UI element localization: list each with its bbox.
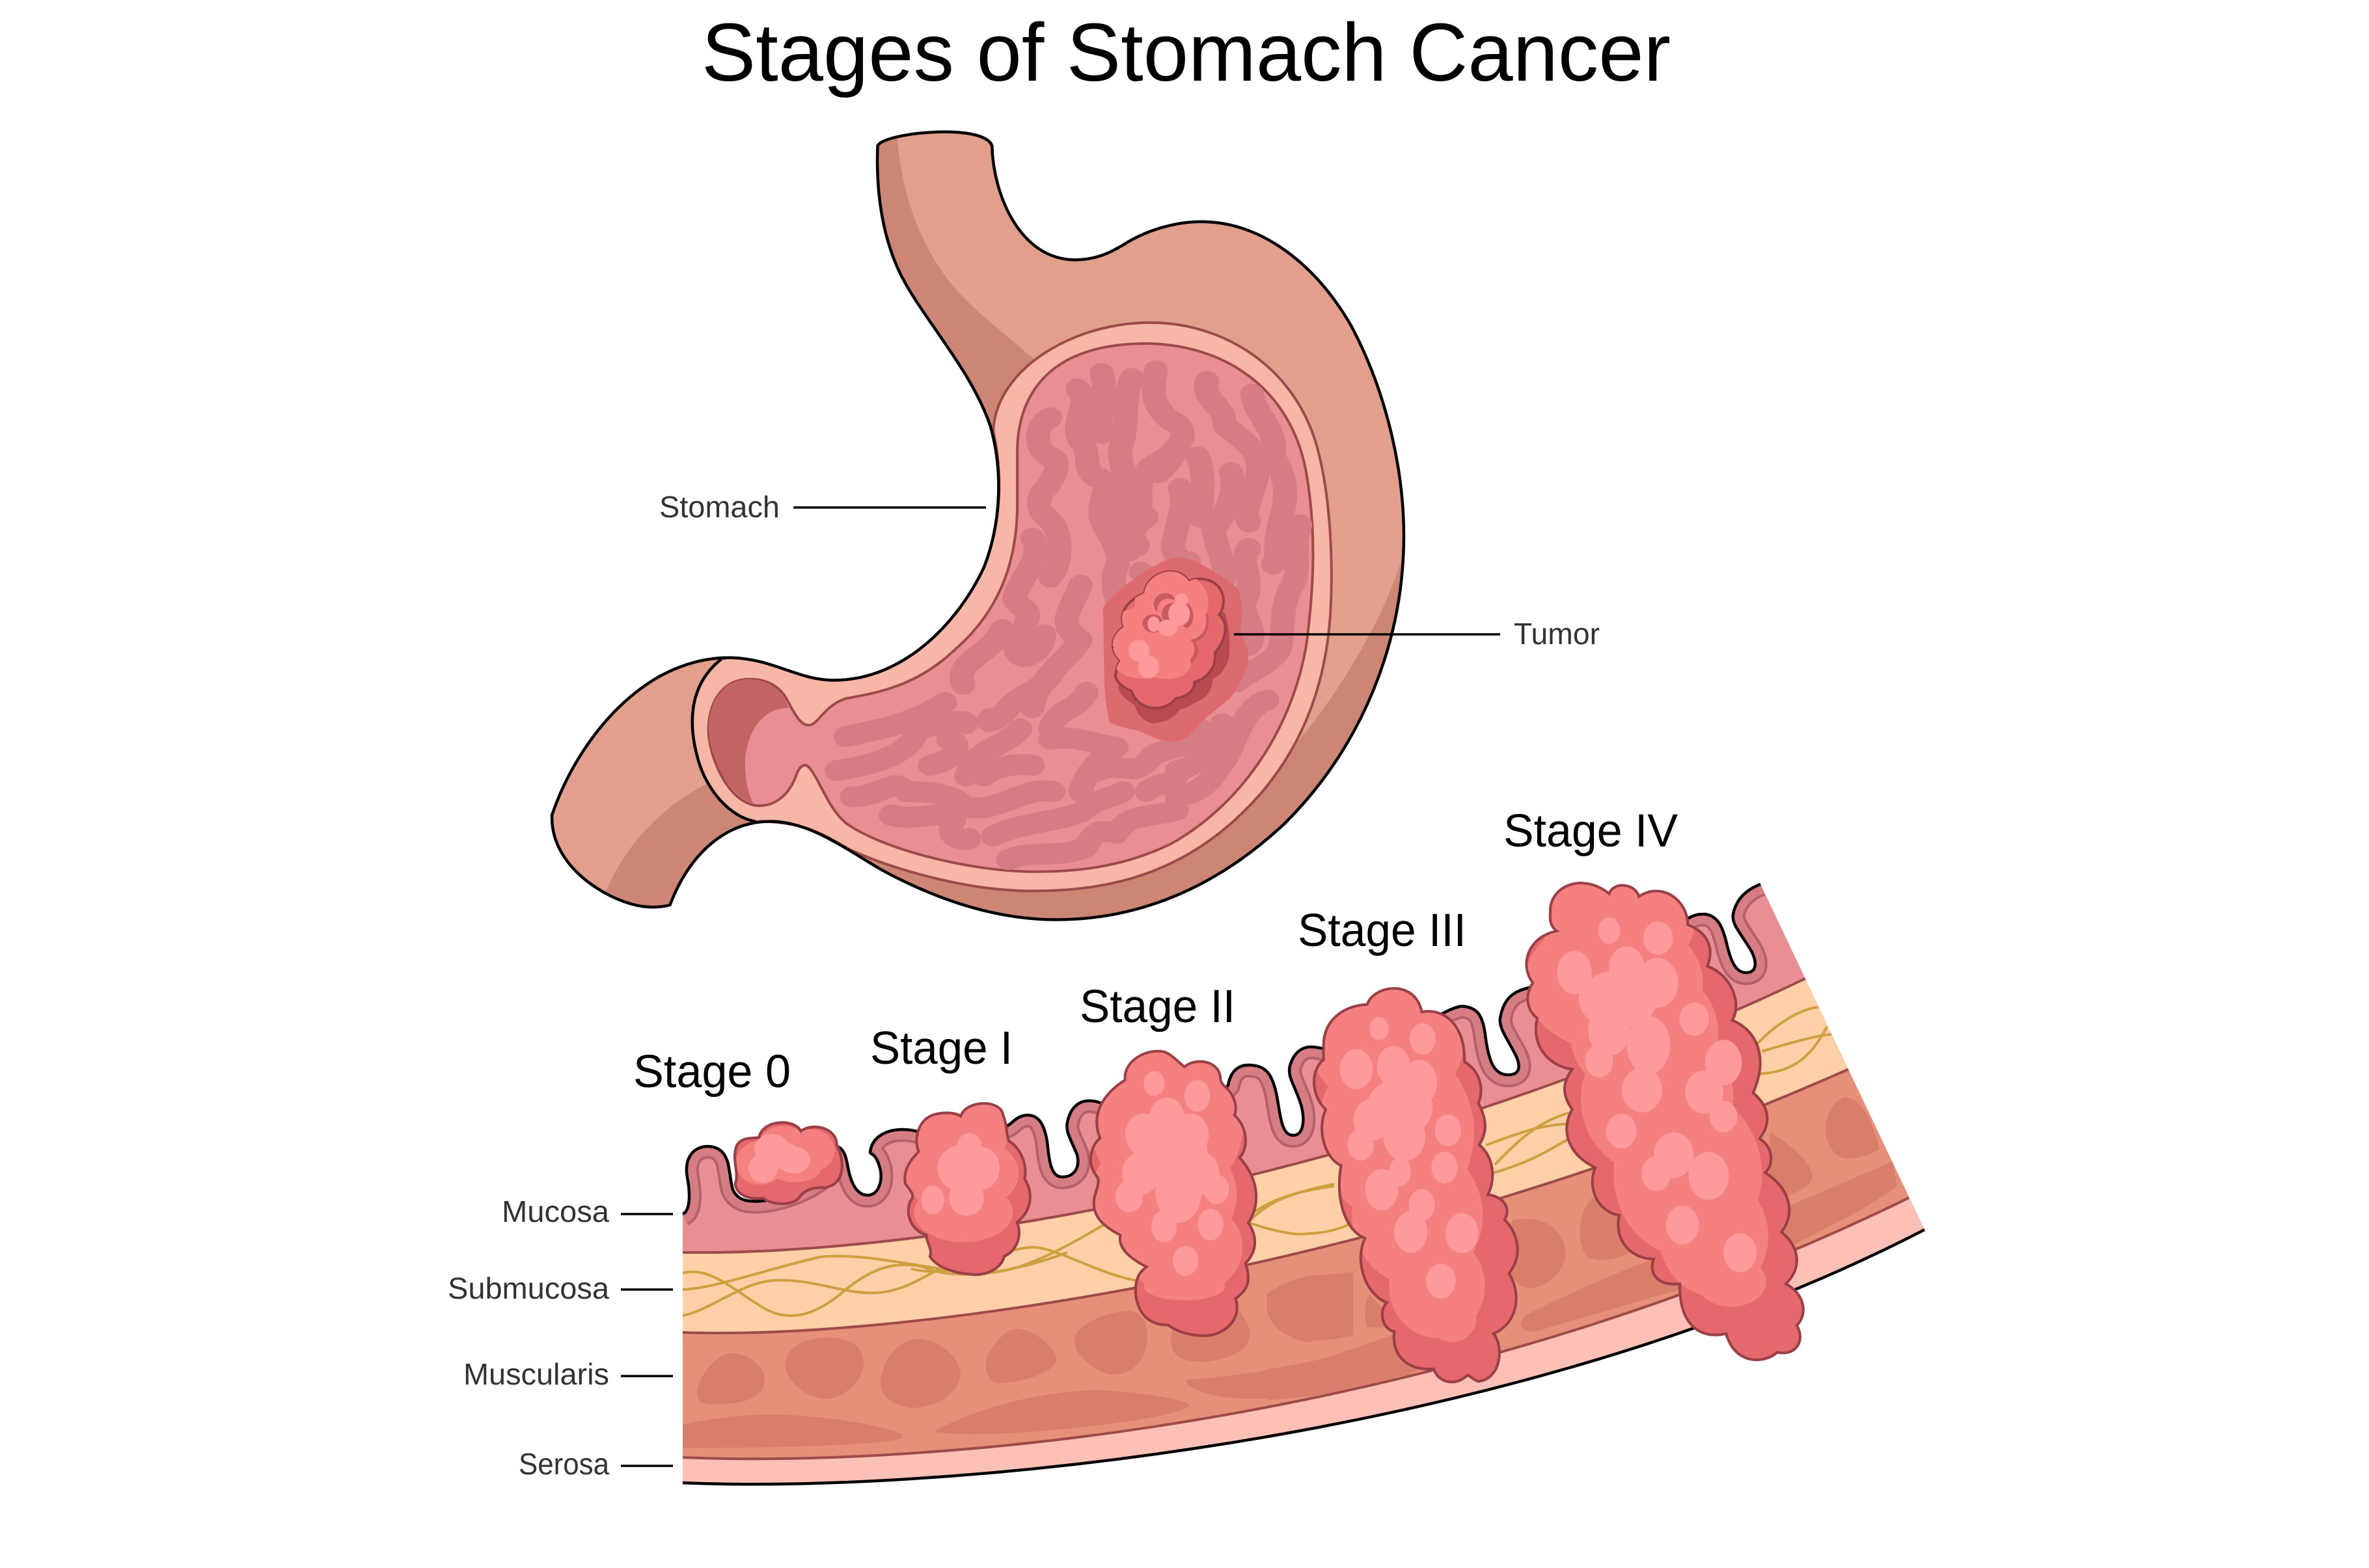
tumor: stage III (1311, 981, 1518, 1382)
label: Submucosa: Submucosa (448, 1271, 609, 1305)
tumor: stage I (903, 1100, 1030, 1275)
tumor: stage II (1091, 1048, 1256, 1336)
label: Serosa: Serosa (519, 1447, 609, 1481)
serosa layer (683, 1197, 1924, 1483)
label: Stage III: Stage III (1298, 905, 1466, 956)
submucosa nerve fibres (683, 1007, 1831, 1316)
tumor: stage IV (1524, 873, 1803, 1360)
tumor on stomach (1103, 558, 1248, 742)
label: Tumor: Tumor (1514, 617, 1600, 651)
gastric rugae folds (837, 371, 1300, 859)
stomach wall lining (692, 323, 1332, 891)
muscularis layer (683, 1070, 1924, 1457)
layer boundary lines (683, 979, 1909, 1459)
label: Stage I: Stage I (870, 1023, 1013, 1074)
label: Muscularis: Muscularis (463, 1357, 609, 1391)
label: Stomach: Stomach (659, 490, 780, 524)
label: Stage II: Stage II (1080, 981, 1235, 1033)
mucosa surface outline (683, 884, 1760, 1214)
stomach mucosa interior (709, 344, 1313, 872)
epithelium border (683, 884, 1760, 1214)
label: Stage IV: Stage IV (1503, 805, 1678, 857)
mucosa layer (683, 884, 1924, 1252)
title: Stages of Stomach Cancer (702, 7, 1671, 98)
stomach outer body (553, 133, 1403, 919)
label: Mucosa: Mucosa (502, 1195, 609, 1228)
muscle fibres, right section (1267, 1097, 1897, 1400)
label: Stage 0: Stage 0 (633, 1046, 791, 1098)
stomach black outline (552, 132, 1404, 920)
bottom outer outline (683, 1230, 1924, 1484)
muscle fibres, left section (679, 1272, 1411, 1448)
stage wall cross-section (682, 882, 1925, 1486)
tumor: stage 0 (735, 1122, 842, 1204)
pyloric opening (709, 679, 789, 804)
submucosa layer (683, 979, 1921, 1332)
pylorus black edge (692, 659, 756, 821)
illustration: stomach cross-section (553, 133, 1403, 919)
